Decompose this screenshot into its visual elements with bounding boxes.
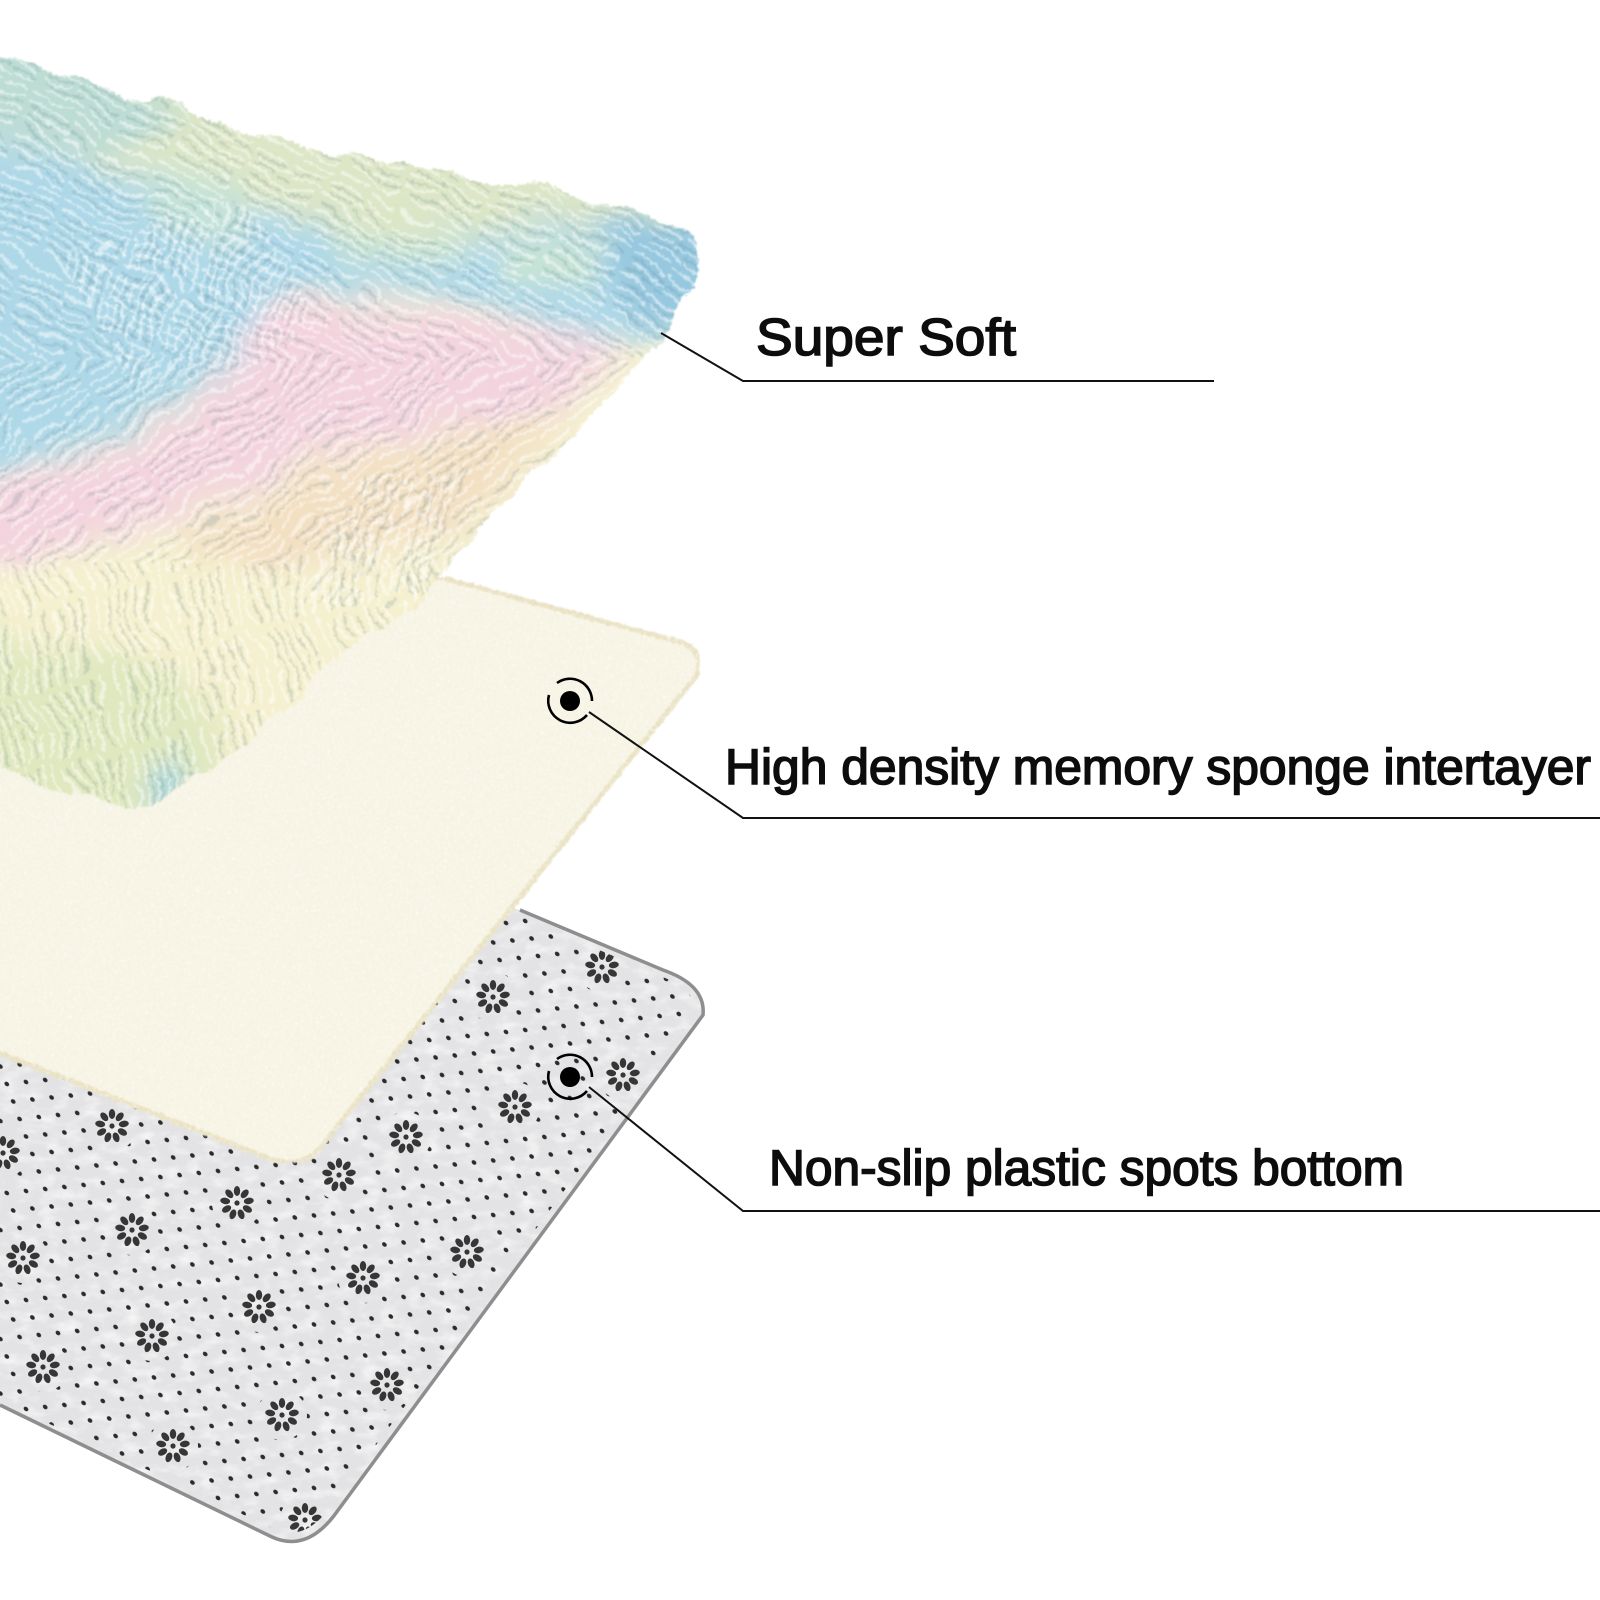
leader line: sponge (589, 712, 1600, 818)
panel: plush top layer (0, 56, 700, 810)
label: super soft: Super Soft (756, 309, 1017, 367)
icon: bottom target (548, 1055, 592, 1099)
leader line: super soft (661, 333, 1214, 381)
callout: super soft (661, 309, 1214, 381)
label: sponge: High density memory sponge intertayer (725, 739, 1591, 795)
panel: non-slip bottom layer (0, 890, 720, 1560)
icon: sponge target (548, 679, 592, 723)
label: non-slip: Non-slip plastic spots bottom (769, 1140, 1404, 1196)
callout: non-slip (548, 1055, 1600, 1211)
leader line: non-slip (589, 1087, 1600, 1211)
panel: memory sponge middle layer (0, 577, 699, 1162)
callout: memory sponge (548, 679, 1600, 818)
